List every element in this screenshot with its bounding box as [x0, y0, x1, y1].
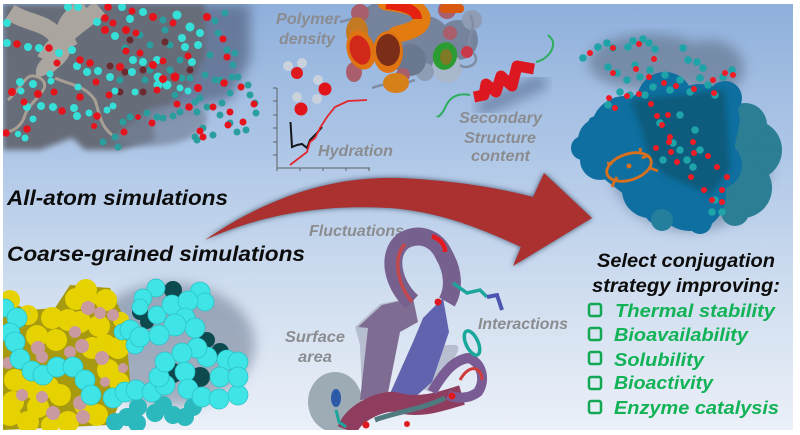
- chart axes: [273, 88, 370, 171]
- conjugation strategy heading: Select conjugation: [597, 251, 775, 272]
- blue ligand end: [487, 295, 502, 310]
- polymer beads dark red: [106, 36, 194, 96]
- lower teal beads: [106, 396, 202, 432]
- secondary structure helix: [437, 35, 553, 117]
- item: thermal stability: Thermal stability: [615, 301, 776, 321]
- orange polymer ribbon: [386, 2, 422, 35]
- polymer density label: [276, 11, 341, 48]
- protein surface: [3, 4, 250, 150]
- secondary structure label: [459, 112, 543, 161]
- left beta strand: [358, 298, 418, 400]
- green residue: [432, 42, 458, 70]
- surface area label: [285, 329, 345, 366]
- right loop: [432, 358, 482, 398]
- polymer density label: Polymer: [276, 11, 341, 28]
- grey protein: [358, 2, 482, 83]
- hydration label: Hydration: [318, 143, 393, 160]
- grey ghost conformers: [355, 300, 458, 395]
- secondary structure label: Secondary: [459, 110, 543, 127]
- grey loops: [340, 15, 476, 88]
- secondary structure label: Structure: [464, 130, 536, 147]
- red ribbon: [474, 66, 534, 97]
- coarse-grained render: [0, 279, 255, 434]
- yellow beads: [0, 279, 129, 434]
- water molecules: [283, 58, 332, 116]
- polymer density label: density: [279, 31, 336, 48]
- black curve: [290, 122, 322, 148]
- helix shadow: [478, 80, 545, 110]
- fluctuations label: Fluctuations: [309, 223, 404, 240]
- surface area label: area: [298, 349, 332, 366]
- top hairpin loop: [393, 237, 452, 302]
- yellow backing: [3, 285, 130, 430]
- polymer haze: [588, 34, 744, 96]
- hydration line chart: [273, 88, 370, 171]
- arrow body: [205, 173, 592, 266]
- faded red residues: [346, 1, 457, 82]
- big curved arrow: [205, 173, 592, 266]
- polymer beads red: [2, 3, 258, 141]
- polymer beads teal: [100, 10, 260, 150]
- surface area patch: [308, 372, 362, 432]
- all-atom simulation render: [2, 3, 259, 150]
- arrow shadow: [205, 173, 592, 266]
- item: solubility: Solubility: [614, 350, 705, 370]
- coarse-grained heading: Coarse-grained simulations: [7, 243, 305, 266]
- item: bioavailability: Bioavailability: [614, 325, 749, 345]
- right beta strand: [388, 298, 449, 408]
- back lobe: [722, 103, 782, 226]
- base ensemble: [347, 395, 462, 430]
- all-atom heading: All-atom simulations: [6, 187, 228, 210]
- item: bioactivity: Bioactivity: [614, 373, 714, 393]
- front lobe: [571, 72, 742, 234]
- teal ring: [461, 329, 483, 357]
- teal beads: [579, 35, 736, 216]
- cyan beads: [0, 279, 248, 409]
- red beads: [587, 41, 736, 205]
- shaded groove: [630, 90, 730, 195]
- improvement checklist: [589, 301, 779, 418]
- orange residue blobs: [342, 4, 473, 93]
- conjugation strategy heading: [592, 251, 780, 297]
- teal ligand stick: [453, 283, 487, 297]
- item: enzyme catalysis: Enzyme catalysis: [614, 398, 779, 418]
- green tails: [437, 35, 553, 117]
- polymer density protein render: [340, 1, 482, 93]
- interactions label: Interactions: [478, 316, 568, 333]
- render shadow: [85, 283, 255, 407]
- conjugated protein render: [571, 34, 782, 234]
- lower left ligand: [336, 410, 346, 427]
- pink beads: [2, 301, 128, 424]
- secondary structure label: content: [471, 148, 531, 165]
- surface area label: Surface: [285, 329, 345, 346]
- polymer beads cyan: [3, 3, 204, 142]
- protein shadow: [606, 170, 775, 237]
- dark gaps: [132, 281, 229, 387]
- red markers: [362, 298, 456, 428]
- red curve: [290, 100, 367, 165]
- conjugation strategy heading: strategy improving:: [592, 276, 780, 297]
- item: solubility: [589, 350, 705, 370]
- fluctuating protein ensemble: [308, 236, 502, 432]
- orange ligand ring: [603, 148, 658, 187]
